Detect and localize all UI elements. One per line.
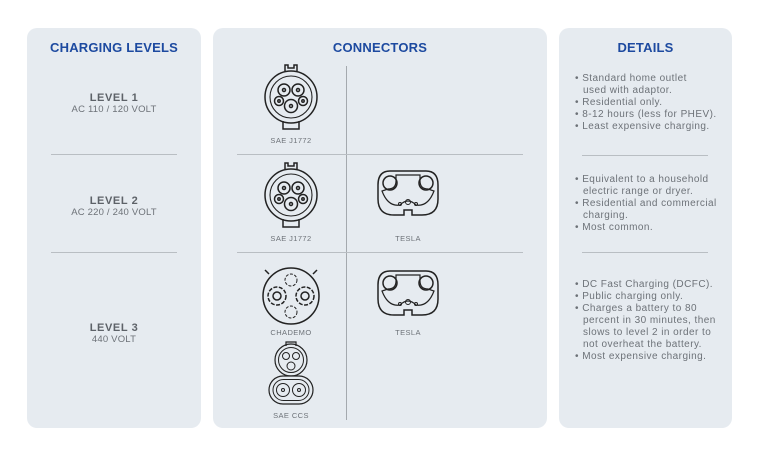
level 2: LEVEL 2 (90, 195, 138, 207)
level 1: LEVEL 1 (90, 92, 138, 104)
panel: charging levels (27, 28, 201, 428)
details level 3: DC Fast Charging (DCFC). (582, 279, 713, 290)
details level 3: percent in 30 minutes, then (583, 315, 716, 326)
details level 3: Most expensive charging. (582, 351, 706, 362)
details level 1 (575, 73, 717, 132)
details level 3: Charges a battery to 80 (582, 303, 697, 314)
details level 1: Least expensive charging. (582, 121, 710, 132)
icon: J1772 level 2 (265, 163, 317, 227)
level 1: AC 110 / 120 VOLT (72, 104, 156, 115)
icon: J1772 level 1 (265, 65, 317, 129)
heading: connectors: CONNECTORS (333, 40, 427, 55)
level 3 (90, 322, 138, 345)
label: tesla level 2: TESLA (395, 234, 421, 243)
level 1 (72, 92, 156, 115)
level 3: 440 VOLT (92, 334, 136, 345)
details level 1: used with adaptor. (583, 85, 672, 96)
heading: details: DETAILS (617, 40, 674, 55)
level 2: AC 220 / 240 VOLT (71, 207, 157, 218)
label: tesla level 3: TESLA (395, 328, 421, 337)
details level 2: charging. (583, 210, 628, 221)
panel: details (559, 28, 732, 428)
label: chademo: CHADEMO (270, 328, 312, 337)
icon: sae ccs (269, 342, 313, 404)
icon: chademo (263, 268, 319, 324)
level 2 (71, 195, 157, 218)
details level 1: Standard home outlet (582, 73, 687, 84)
label: SAE J1772 level 1: SAE J1772 (270, 136, 312, 145)
details level 3: Public charging only. (582, 291, 683, 302)
details level 1: 8-12 hours (less for PHEV). (582, 109, 717, 120)
label: sae ccs: SAE CCS (273, 411, 309, 420)
details level 3: slows to level 2 in order to (583, 327, 711, 338)
details level 2: Residential and commercial (582, 198, 717, 209)
details level 3: not overheat the battery. (583, 339, 702, 350)
label: SAE J1772 level 2: SAE J1772 (270, 234, 312, 243)
details level 2 (575, 174, 717, 233)
icon: tesla level 3 (378, 271, 438, 315)
details level 1: Residential only. (582, 97, 662, 108)
details level 3 (575, 279, 716, 362)
details level 2: Most common. (582, 222, 653, 233)
details level 2: Equivalent to a household (582, 174, 709, 185)
icon: tesla level 2 (378, 171, 438, 215)
heading: charging levels: CHARGING LEVELS (50, 40, 178, 55)
panel: connectors (213, 28, 547, 428)
level 3: LEVEL 3 (90, 322, 138, 334)
details level 2: electric range or dryer. (583, 186, 693, 197)
